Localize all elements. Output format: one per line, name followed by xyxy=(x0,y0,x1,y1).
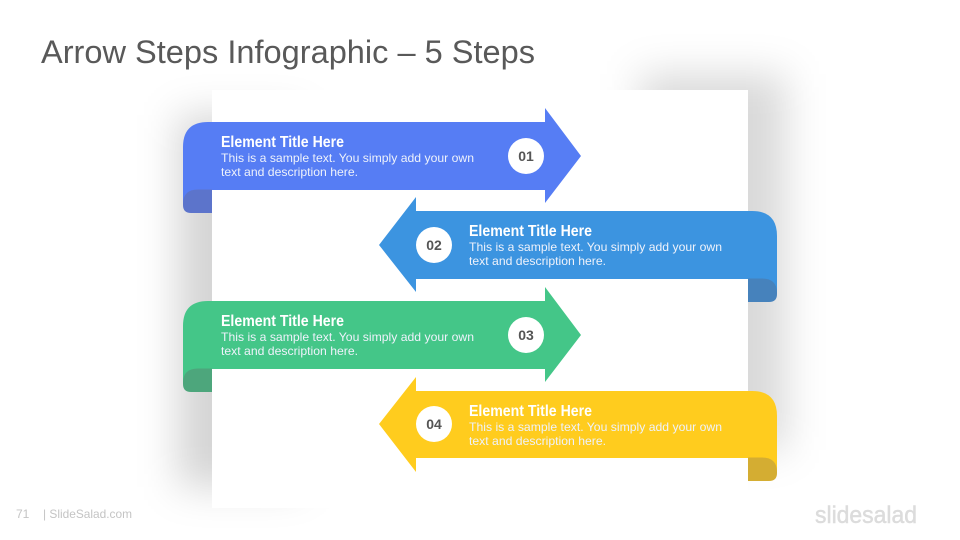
fold 3 xyxy=(183,368,212,392)
badge 4 xyxy=(416,406,452,442)
title: Arrow Steps Infographic – 5 Steps xyxy=(41,34,535,70)
step 4 arrow xyxy=(379,377,777,481)
arrow body 3 xyxy=(183,287,581,384)
arrow body 1 xyxy=(183,108,581,205)
badge 1: 01 xyxy=(518,148,534,164)
step 1 arrow xyxy=(183,108,581,213)
text 4: This is a sample text. You simply add your own xyxy=(469,420,722,434)
text 3: text and description here. xyxy=(221,344,358,358)
fold 4 xyxy=(748,458,777,481)
paper sheet with shadows xyxy=(178,74,786,508)
text 2: Element Title Here xyxy=(469,223,592,240)
badge 3 xyxy=(508,317,544,353)
arrow body 4 xyxy=(379,377,777,473)
text 3: Element Title Here xyxy=(221,313,344,330)
text 4: Element Title Here xyxy=(469,403,592,420)
text 1 xyxy=(221,134,474,179)
text 2 xyxy=(469,223,722,268)
text 1: text and description here. xyxy=(221,165,358,179)
text 2: text and description here. xyxy=(469,254,606,268)
badge 4: 04 xyxy=(426,416,442,432)
badge 2 xyxy=(416,227,452,263)
logo wordmark: slidesalad xyxy=(815,502,917,529)
step 3 arrow xyxy=(183,287,581,392)
text 3 xyxy=(221,313,474,358)
badge 1 xyxy=(508,138,544,174)
text 1: This is a sample text. You simply add your own xyxy=(221,151,474,165)
fold 1 xyxy=(183,190,212,213)
step 2 arrow xyxy=(379,197,777,302)
badge 2: 02 xyxy=(426,237,442,253)
text 3: This is a sample text. You simply add your own xyxy=(221,330,474,344)
text 4 xyxy=(469,403,722,448)
footer page number: 71 xyxy=(16,507,30,521)
text 4: text and description here. xyxy=(469,434,606,448)
badge 3: 03 xyxy=(518,327,534,343)
footer source: | SlideSalad.com xyxy=(43,507,132,521)
fold 2 xyxy=(748,278,777,302)
text 1: Element Title Here xyxy=(221,134,344,151)
arrow body 2 xyxy=(379,197,777,294)
text 2: This is a sample text. You simply add your own xyxy=(469,240,722,254)
